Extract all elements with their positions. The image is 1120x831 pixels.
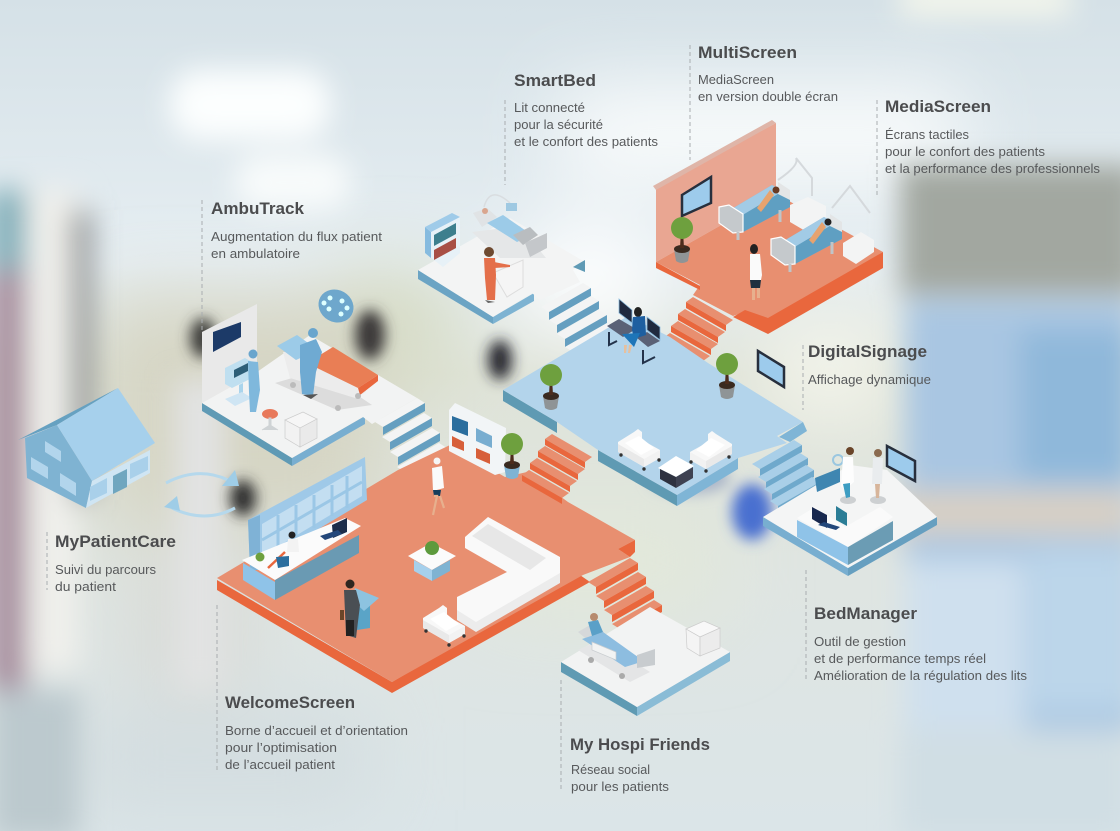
blue stairs to bed manager [752, 440, 820, 513]
label: BedManager: Amélioration de la régulation des lits [814, 669, 1027, 683]
label: MediaScreen: Écrans tactiles [885, 127, 969, 142]
stairs to My Hospi Friends [588, 558, 662, 636]
red stairs down [663, 297, 733, 367]
nurse [870, 449, 886, 504]
wall screen [887, 446, 915, 481]
label: MyPatientCare: Suivi du parcours [55, 563, 156, 577]
patient bed [578, 613, 655, 682]
doctor [840, 447, 856, 504]
desk [797, 507, 893, 565]
stairs to welcome floor [375, 398, 447, 480]
label: BedManager: BedManager [814, 604, 917, 623]
icon: exchange arrows [164, 470, 239, 516]
smart bed [472, 195, 547, 258]
label: AmbuTrack: Augmentation du flux patient [211, 230, 383, 244]
display shelf [449, 403, 506, 475]
label: MultiScreen: MediaScreen [698, 73, 774, 87]
label: AmbuTrack: AmbuTrack [211, 199, 305, 218]
filing wall [248, 457, 367, 570]
label: MultiScreen [698, 43, 838, 104]
label: SmartBed: SmartBed [514, 71, 596, 90]
reception desk [242, 518, 361, 600]
staff: surgeon and technician [248, 328, 322, 412]
nurse with tablet [432, 458, 444, 515]
platform: My Hospi Friends [561, 607, 730, 716]
coffee table with plant [408, 541, 456, 581]
leader lines [47, 45, 877, 790]
label: SmartBed: pour la sécurité [514, 118, 603, 132]
label: DigitalSignage [808, 342, 931, 387]
label: MyPatientCare: du patient [55, 580, 117, 594]
label: MultiScreen: en version double écran [698, 90, 838, 104]
wall screen [682, 177, 711, 216]
operating bed [275, 335, 378, 411]
computers [812, 506, 847, 530]
label: WelcomeScreen: pour l’optimisation [225, 741, 337, 755]
nurse and cart [484, 247, 523, 303]
label: SmartBed: Lit connecté [514, 101, 585, 115]
label: BedManager: et de performance temps réel [814, 652, 986, 666]
platform: MultiScreen room [653, 120, 883, 367]
plants [540, 353, 738, 410]
platform: AmbuTrack [202, 283, 447, 480]
label: MediaScreen: MediaScreen [885, 97, 991, 116]
platform: WelcomeScreen floor [217, 403, 662, 693]
operating lamp [312, 283, 360, 329]
printer cart [285, 412, 317, 447]
label: AmbuTrack: en ambulatoire [211, 247, 300, 261]
label: My Hospi Friends [570, 735, 710, 794]
platform: SmartBed [418, 195, 615, 360]
label: MediaScreen: et la performance des professionnels [885, 162, 1100, 176]
shelf [425, 213, 460, 267]
armchair [423, 605, 466, 647]
label: MediaScreen [885, 97, 1100, 176]
stairs to blue platform [522, 434, 592, 504]
label: MediaScreen: pour le confort des patients [885, 145, 1045, 159]
L sofa [457, 517, 560, 632]
bed 1 [719, 182, 790, 240]
label: DigitalSignage: DigitalSignage [808, 342, 927, 361]
icon: digital signage screen [758, 351, 784, 387]
businessman at kiosk [340, 580, 379, 638]
label: MyPatientCare: MyPatientCare [55, 532, 176, 551]
stool [262, 409, 278, 430]
plant [671, 217, 693, 263]
armchairs [618, 429, 732, 473]
label: WelcomeScreen: de l’accueil patient [225, 758, 336, 772]
label: MyPatientCare [55, 532, 176, 594]
label: My Hospi Friends: pour les patients [571, 780, 669, 794]
stairs to blue platform [541, 283, 615, 360]
waiting bench with visitor [607, 299, 660, 363]
platform: DigitalSignage lobby [503, 299, 807, 506]
coffee table [658, 456, 694, 488]
bed arms [778, 158, 870, 213]
label: BedManager [814, 604, 1027, 683]
plant [501, 433, 523, 479]
label: WelcomeScreen: WelcomeScreen [225, 693, 355, 712]
label: My Hospi Friends: Réseau social [571, 763, 650, 777]
label: SmartBed [514, 71, 658, 149]
label: WelcomeScreen [225, 693, 408, 772]
cart [686, 621, 720, 656]
label: DigitalSignage: Affichage dynamique [808, 373, 931, 387]
x-ray console [225, 358, 252, 406]
bed 2 [771, 214, 842, 272]
imaging device [815, 455, 843, 492]
label: My Hospi Friends: My Hospi Friends [570, 735, 710, 754]
label: SmartBed: et le confort des patients [514, 135, 658, 149]
label: WelcomeScreen: Borne d’accueil et d’orientation [225, 724, 408, 738]
label: AmbuTrack [211, 199, 383, 261]
wall screen [213, 322, 241, 352]
bedside tables [790, 197, 874, 264]
icon: house [18, 388, 155, 508]
label: BedManager: Outil de gestion [814, 635, 906, 649]
label: MultiScreen: MultiScreen [698, 43, 797, 62]
nurse [750, 244, 762, 300]
platform: BedManager [763, 446, 937, 576]
